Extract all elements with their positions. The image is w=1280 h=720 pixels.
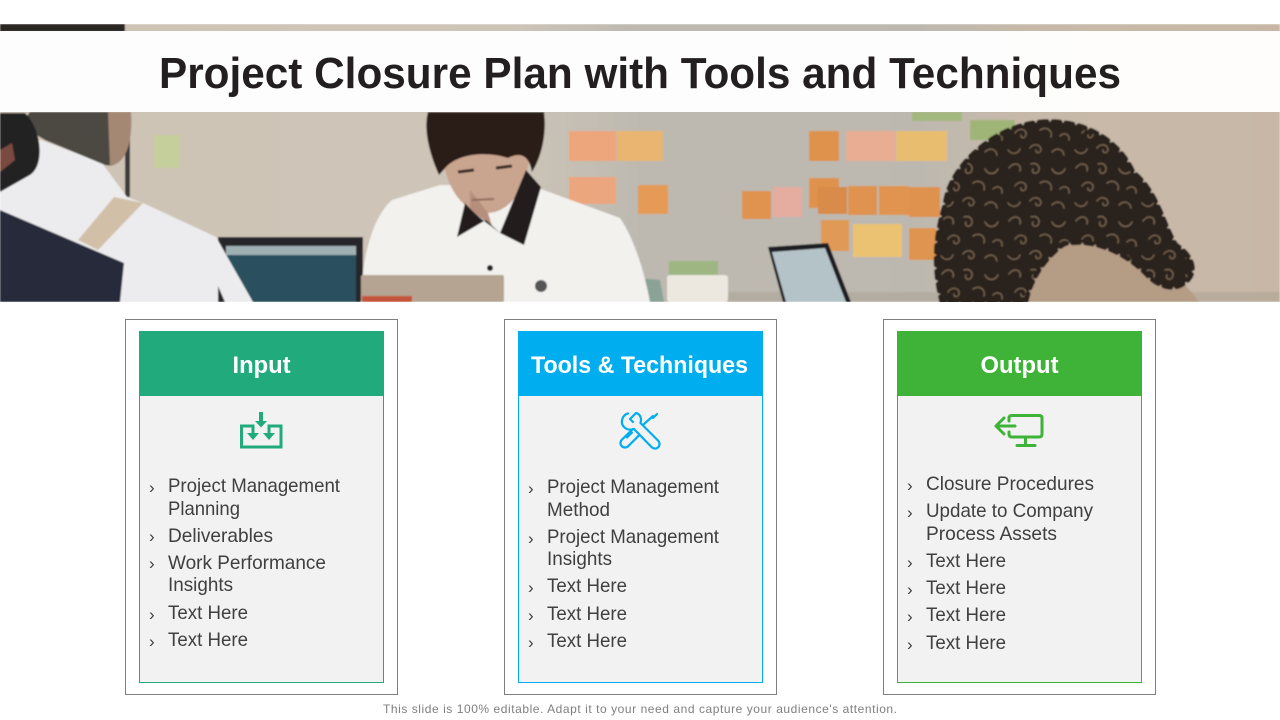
list: tools items: Project Management [547, 526, 720, 548]
heading: tools and techniques [518, 331, 763, 396]
list: output items: › [907, 553, 913, 572]
list: input items: Work Performance [168, 552, 326, 574]
list: input items: Insights [168, 574, 233, 596]
list: output items: › [907, 503, 913, 522]
list: input items: Planning [168, 498, 240, 520]
list: output items: Text Here [926, 550, 1006, 572]
title: Project Closure Plan with Tools and Techniques [159, 49, 1121, 98]
icon: monitor with arrow [996, 416, 1042, 446]
list: output items: › [907, 580, 913, 599]
list: input items: Text Here [168, 629, 248, 651]
list: tools items: Text Here [547, 630, 627, 652]
list: tools items: › [528, 578, 534, 597]
list: tools items: › [528, 606, 534, 625]
panel: tools and techniques [504, 320, 776, 694]
list: output items: › [907, 635, 913, 654]
list: output items: Text Here [926, 577, 1006, 599]
list: tools items: Method [547, 499, 610, 521]
list: output items: Update to Company [926, 500, 1093, 522]
panel: input [126, 320, 398, 694]
list: output items: Process Assets [926, 523, 1057, 545]
list: output items: › [907, 607, 913, 626]
list: output items: Text Here [926, 632, 1006, 654]
heading: input: Input [232, 352, 291, 379]
list: output items: Closure Procedures [926, 473, 1094, 495]
photo: team working at laptops [0, 24, 1280, 302]
list: input items: Project Management [168, 475, 341, 497]
list: input items: Deliverables [168, 525, 273, 547]
list: input items: Text Here [168, 602, 248, 624]
list: tools items: › [528, 479, 534, 498]
list: output items: Text Here [926, 604, 1006, 626]
list: tools items: Insights [547, 548, 612, 570]
list: input items: › [149, 605, 155, 624]
list: tools items [528, 476, 720, 652]
list: tools items: Project Management [547, 476, 720, 498]
heading: output [897, 331, 1142, 396]
footer note: This slide is 100% editable. Adapt it to your need and capture your audience's attention. [383, 702, 897, 716]
list: input items: › [149, 554, 155, 573]
list: tools items: Text Here [547, 603, 627, 625]
heading: input [139, 331, 384, 396]
panel: output [884, 320, 1156, 694]
list: tools items: › [528, 633, 534, 652]
heading: tools and techniques: Tools & Techniques [531, 352, 748, 379]
icon: wrench and screwdriver [620, 413, 660, 449]
list: output items [907, 473, 1094, 654]
list: tools items: Text Here [547, 575, 627, 597]
list: output items: › [907, 476, 913, 495]
title band [0, 31, 1280, 112]
heading: output: Output [980, 352, 1058, 379]
list: input items: › [149, 632, 155, 651]
list: input items: › [149, 527, 155, 546]
list: input items: › [149, 478, 155, 497]
list: tools items: › [528, 529, 534, 548]
icon: inbox with arrows [242, 412, 281, 447]
list: input items [149, 475, 341, 651]
